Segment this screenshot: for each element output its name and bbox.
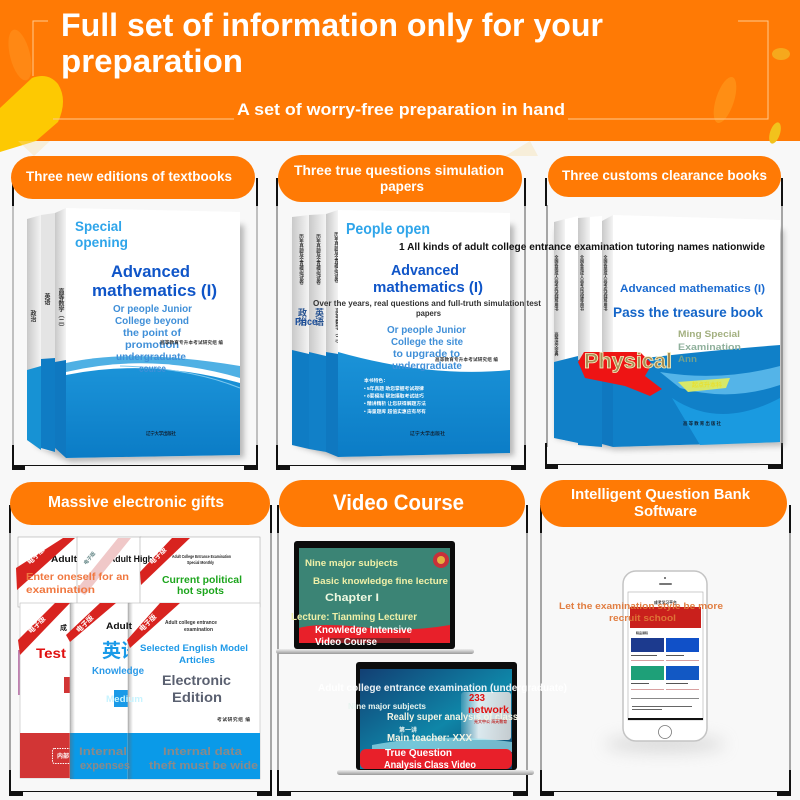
laptop: basic knowledge lecture: Video Course — [315, 637, 377, 648]
front document 3: Articles — [179, 655, 215, 666]
book set: advanced mathematics textbooks: College beyond — [115, 316, 189, 327]
subtitle: A set of worry-free preparation in hand — [237, 100, 565, 119]
book set: advanced mathematics textbooks: undergraduate — [116, 352, 186, 363]
phone: question bank app: recruit school — [609, 613, 676, 624]
back book — [554, 216, 578, 443]
book set: advanced mathematics textbooks: promotion — [125, 340, 179, 351]
book set: advanced mathematics textbooks: 高等教育专升本考试研究组 编 — [160, 339, 223, 346]
book set: customs clearance books: 起点升本科 — [692, 381, 722, 389]
front document 1: 成 — [60, 623, 67, 632]
book set: simulation papers: 辽宁大学出版社 — [410, 430, 445, 437]
back document 3: hot spots — [177, 586, 224, 597]
front cover — [613, 215, 780, 447]
laptop: true question analysis: 第一讲 — [399, 726, 417, 734]
coin: right — [709, 74, 741, 126]
back document 2 — [77, 537, 141, 607]
back document 3: Current political — [162, 575, 242, 586]
ribbon: back document 3 — [140, 538, 190, 585]
laptop: true question analysis: Analysis Class Video — [384, 760, 476, 771]
front book spine — [55, 208, 66, 458]
seal — [433, 552, 449, 568]
text: internal expenses: expenses — [80, 760, 130, 772]
front cover — [338, 210, 510, 457]
laptop: true question analysis: Main teacher: XXX — [387, 733, 472, 744]
ribbon: back document 2: 电子版 — [82, 550, 97, 566]
text: enter oneself for an examination: examination — [26, 584, 95, 596]
book set: customs clearance books: Physical — [584, 350, 672, 373]
front book spine — [326, 210, 341, 457]
front book spine: 高等数学（二） — [334, 307, 341, 346]
middle book spine: English — [41, 213, 55, 452]
pill: three true questions simulation papers: papers — [380, 179, 424, 194]
laptop: basic knowledge lecture: Knowledge Intensive — [315, 625, 412, 636]
ribbon: front document 1: 电子版 — [26, 614, 47, 635]
book features list: 本书特色： — [364, 377, 388, 384]
book set: customs clearance books: Examination — [678, 342, 741, 353]
laptop: basic knowledge lecture: Nine major subjects — [305, 558, 398, 569]
front document 3: Edition — [172, 689, 222, 705]
pill: intelligent question bank software: Intelligent Question Bank — [571, 487, 751, 503]
book features list: • 海量题库 超值实惠应有尽有 — [364, 408, 426, 415]
laptop: true question analysis: 光大中公 海天教育 — [474, 718, 507, 724]
book set: advanced mathematics textbooks: course — [139, 364, 166, 375]
phone: question bank app — [559, 571, 725, 752]
ribbon: back document 1: 电子版 — [25, 545, 46, 566]
laptop: true question analysis: network — [468, 705, 509, 716]
pill: three true questions simulation papers — [278, 155, 522, 202]
faint coins under banner — [18, 141, 538, 156]
laptop: true question analysis: Nine major subjects — [348, 702, 427, 711]
front document 3 — [128, 603, 260, 779]
title: preparation — [61, 43, 243, 79]
middle book — [578, 216, 602, 447]
text: enter oneself for an examination: Enter oneself for an — [26, 571, 129, 583]
book features list: • 精讲精析 让您获得解题方法 — [364, 400, 426, 407]
back book spine: politics — [27, 215, 41, 450]
book set: customs clearance books: Advanced mathematics (I) — [620, 283, 765, 295]
book set: customs clearance books: Pass the treasure book — [613, 305, 763, 320]
pill: three new editions of textbooks — [11, 156, 255, 199]
phone: question bank app: 精品课程 — [636, 630, 648, 635]
header frame lines — [33, 21, 768, 119]
book set: advanced mathematics textbooks — [27, 208, 244, 462]
front document 3: Selected English Model — [140, 643, 248, 654]
book set: simulation papers — [292, 210, 514, 460]
middle book: 全国各类成人高考应试辅导用书 — [580, 254, 585, 312]
middle book spine: 英语 — [314, 307, 324, 327]
laptop: basic knowledge lecture: Basic knowledge fine lecture — [313, 576, 448, 587]
book set: advanced mathematics textbooks: Or people Junior — [113, 304, 192, 315]
back document 3: Special Monthly — [187, 560, 214, 565]
laptop: basic knowledge lecture — [276, 541, 474, 654]
document set: electronic gifts — [16, 537, 260, 779]
front book spine: 全国各类成人高考应试辅导用书 — [604, 254, 608, 312]
overlay text: adult college tutoring names: 1 All kinds of adult college entrance examination tutoring names nationwide — [399, 242, 765, 253]
book set: advanced mathematics textbooks: 辽宁大学出版社 — [146, 430, 176, 437]
book set: simulation papers: to upgrade to — [393, 349, 460, 360]
overlay text: real questions and simulation: papers — [416, 309, 442, 318]
text: adult high: Adult High — [109, 554, 153, 564]
book set: simulation papers: College the site — [391, 337, 463, 348]
pill: three customs clearance books — [548, 156, 781, 197]
book set: customs clearance books: Ming Special — [678, 329, 740, 340]
front cover — [66, 208, 240, 458]
ribbon: front document 3 — [127, 603, 180, 648]
course tile: blue — [666, 638, 699, 652]
back book spine: 政治 — [297, 307, 307, 327]
pill: massive electronic gifts — [10, 482, 270, 525]
ribbon: back document 2 — [76, 538, 131, 595]
front book spine — [602, 215, 613, 447]
panel frame: textbooks — [12, 178, 258, 470]
laptop: true question analysis: 233 — [469, 693, 485, 704]
front document 2: 英语 — [102, 640, 140, 662]
course tile: light blue — [666, 666, 699, 680]
book set: customs clearance books — [554, 215, 784, 450]
pill: three customs clearance books: Three customs clearance books — [562, 168, 767, 183]
text: knowledge: Knowledge — [92, 666, 144, 677]
laptop: true question analysis: True Question — [385, 748, 452, 759]
book set: simulation papers: mathematics (I) — [373, 280, 483, 296]
back book: 全国各类成人高考应试辅导用书 — [554, 254, 560, 312]
ribbon: back document 3: 电子版 — [147, 545, 168, 566]
laptop: basic knowledge lecture: Lecture: Tianming Lecturer — [291, 612, 417, 623]
book set: simulation papers: undergraduate — [392, 361, 462, 372]
front document 3: Electronic — [162, 672, 231, 688]
ribbon: front document 2 — [66, 603, 116, 642]
back book spine: politics: 政治 — [29, 309, 36, 323]
book set: advanced mathematics textbooks: the point of — [123, 328, 182, 339]
book set: advanced mathematics textbooks: mathematics (I) — [92, 282, 217, 300]
back book spine: 历年真题及全真模拟试卷 — [299, 234, 304, 285]
ribbon: front document 2: 电子版 — [74, 613, 95, 634]
middle book spine: 历年真题及全真模拟试卷 — [316, 234, 322, 285]
ribbon: front document 1 — [18, 603, 70, 655]
text: front adult: Adult — [106, 621, 133, 632]
front document 2 — [70, 603, 140, 779]
panel frame: simulation papers — [276, 178, 526, 470]
book set: advanced mathematics textbooks: Special — [75, 218, 122, 234]
phone: question bank app: 成考学习平台 — [654, 600, 677, 605]
laptop: true question analysis — [318, 662, 567, 775]
text: internal data theft must be wide: Internal data — [163, 746, 243, 758]
course tile: navy — [631, 638, 664, 652]
pill: intelligent question bank software — [540, 480, 787, 527]
decorative yellow capsule — [0, 76, 63, 152]
panel frame: video course — [277, 505, 528, 796]
front book spine: 高等数学（二） — [57, 287, 64, 330]
pill: three new editions of textbooks: Three new editions of textbooks — [26, 169, 232, 184]
back document 3 — [140, 537, 260, 607]
pill: video course: Video Course — [333, 490, 464, 515]
middle book spine: English: 英语 — [43, 292, 50, 306]
front document 3: examination — [184, 627, 214, 633]
book set: simulation papers: People open — [346, 221, 430, 238]
ribbon: back document 1 — [16, 538, 75, 590]
ribbon: front document 3: 电子版 — [137, 612, 158, 633]
panel frame: electronic gifts — [9, 505, 272, 796]
book set: simulation papers: Advanced — [391, 263, 459, 279]
back document 1 — [18, 537, 78, 607]
book features list: • 8套模拟 帮您摸取考试技巧 — [364, 392, 424, 400]
text: medium: Medium — [106, 694, 143, 705]
pill: massive electronic gifts: Massive electronic gifts — [48, 494, 224, 511]
laptop: basic knowledge lecture: Chapter I — [325, 592, 379, 604]
front document 1: Test — [36, 645, 66, 661]
book set: simulation papers: Or people Junior — [387, 325, 466, 336]
book features list: • 5年真题 助您掌握考试规律 — [364, 385, 424, 392]
panel frame: clearance books — [545, 178, 783, 469]
header banner — [0, 0, 800, 152]
text: adult: Adult — [51, 554, 78, 565]
overlay text: real questions and simulation: Over the years, real questions and full-truth simulation test — [313, 299, 541, 308]
front document 3: 考试研究组 编 — [217, 716, 250, 723]
laptop: true question analysis: Really super analysis of class — [387, 712, 518, 723]
title: Full set of information only for your — [61, 7, 603, 43]
coin: lower right — [767, 121, 783, 145]
pill: intelligent question bank software: Software — [634, 504, 697, 520]
text: internal expenses: Internal — [79, 746, 127, 758]
front document 1 — [18, 603, 72, 778]
book set: advanced mathematics textbooks: opening — [75, 234, 128, 250]
front document 1: 内部 — [57, 752, 69, 760]
price label: Price — [295, 316, 317, 328]
yellow ribbon — [678, 378, 730, 392]
red splash — [578, 352, 662, 396]
panel frame: question bank — [540, 505, 791, 796]
pill: video course — [279, 480, 525, 527]
coin: right edge — [772, 48, 790, 60]
book set: customs clearance books: Ann — [678, 354, 697, 365]
pill: three true questions simulation papers: Three true questions simulation — [294, 163, 504, 178]
text: internal data theft must be wide: theft must be wide — [149, 760, 258, 772]
book set: customs clearance books: 高等教育出版社 — [683, 420, 722, 427]
course tile: green — [631, 666, 664, 680]
book set: simulation papers: 高等教育专升本考试研究组 编 — [435, 356, 498, 363]
back document 3: Adult College Entrance Examination — [172, 554, 231, 559]
phone: question bank app: Let the examination style be more — [559, 601, 723, 612]
front book spine: 历年真题及全真模拟试卷 — [334, 232, 340, 283]
app banner — [630, 607, 701, 628]
laptop: true question analysis: Adult college entrance examination (undergraduate) — [318, 683, 567, 694]
coin: left — [4, 27, 36, 83]
book set: advanced mathematics textbooks: Advanced — [111, 263, 190, 281]
front document 3: Adult college entrance — [165, 620, 217, 626]
middle book spine — [309, 214, 326, 452]
back book spine — [292, 215, 309, 449]
back book: 高等语文宝典 — [554, 331, 560, 357]
